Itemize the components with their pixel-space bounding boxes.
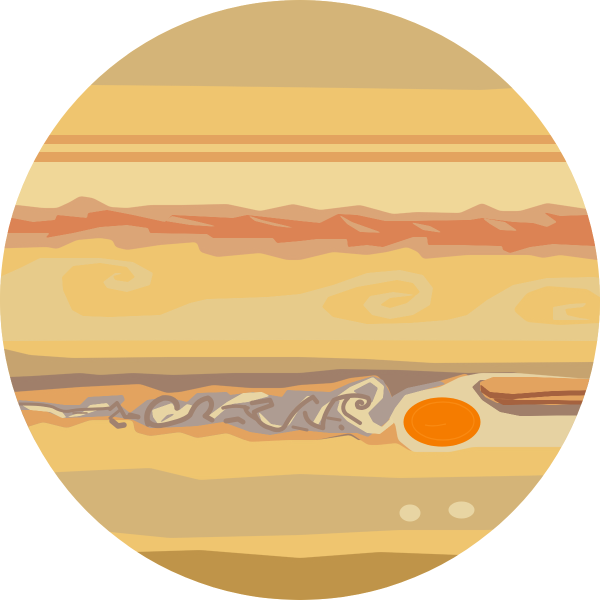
orange turbulence band bbox=[14, 374, 468, 451]
right swirl inner bbox=[513, 286, 600, 325]
white oval left bbox=[400, 504, 420, 522]
first swirl fill bbox=[152, 403, 181, 424]
turbulence cream streaks bbox=[20, 377, 394, 434]
south polar cap bbox=[136, 550, 458, 600]
middle ribbon bbox=[208, 392, 270, 419]
orange belt streak bbox=[0, 210, 600, 253]
hood stripes bbox=[480, 385, 586, 405]
inner gray patch bbox=[354, 382, 378, 402]
ribbon lower left bbox=[259, 396, 310, 428]
thin stripe lower bbox=[34, 152, 566, 162]
north polar cap bbox=[91, 0, 512, 90]
left stream bbox=[20, 403, 111, 418]
sand belt bbox=[0, 344, 600, 440]
pale zone bbox=[0, 162, 600, 222]
upper cream lobe bbox=[312, 377, 394, 434]
s ribbon left bbox=[158, 404, 194, 424]
white oval right bbox=[448, 502, 474, 518]
great red spot bbox=[404, 397, 480, 447]
spot body bbox=[404, 397, 480, 447]
right swirl curl bbox=[553, 303, 589, 320]
turbulence gray mass bbox=[18, 376, 393, 437]
turbulence brown swirls bbox=[20, 396, 369, 430]
tan turbulent belt bbox=[0, 196, 600, 262]
thin stripe upper bbox=[44, 135, 556, 144]
south yellow band bbox=[28, 420, 562, 480]
tan slivers in streak bbox=[165, 214, 518, 233]
spot inner swirls bbox=[412, 402, 474, 440]
gray edge of spot zone bbox=[368, 381, 444, 436]
swirl region bbox=[0, 258, 600, 341]
pale stripe gap bbox=[39, 144, 561, 152]
brown belt bbox=[0, 369, 530, 440]
brown lens behind hood bbox=[472, 380, 600, 416]
orange hood bbox=[480, 377, 600, 405]
pale oval zone around great spot bbox=[388, 373, 600, 452]
south tan belt bbox=[40, 468, 560, 538]
